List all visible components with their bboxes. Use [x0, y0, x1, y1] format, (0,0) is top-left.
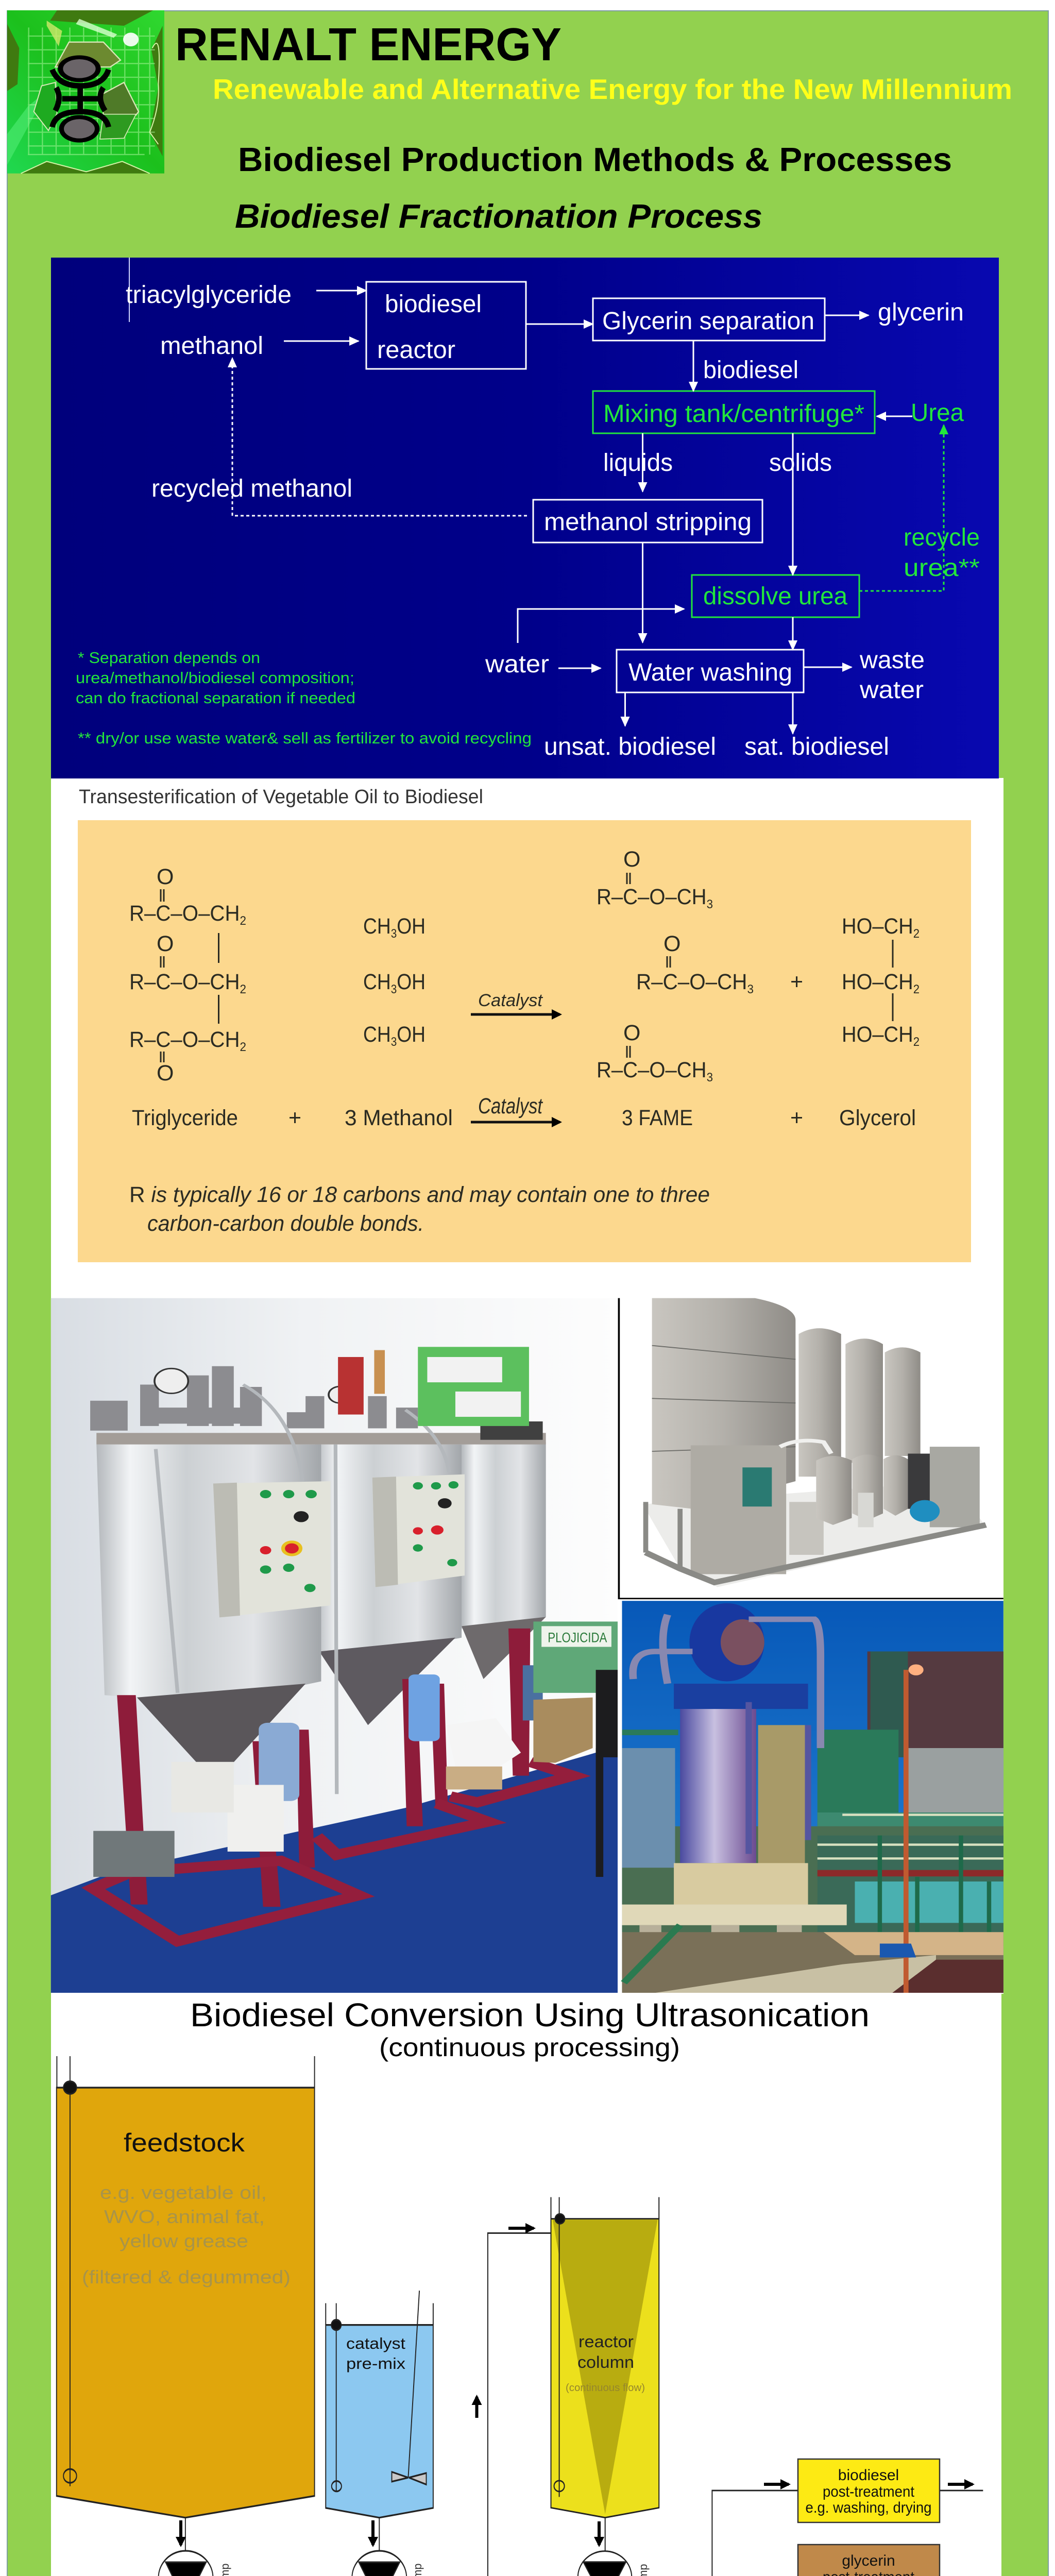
methanol formulas: 3 — [391, 982, 397, 996]
flowchart labels: water — [485, 651, 549, 678]
glycerol structure: 2 — [913, 927, 920, 941]
flowchart labels: waste — [859, 647, 925, 674]
triglyceride structure: R–C–O–CH — [129, 1027, 247, 1052]
flowchart labels: methanol stripping — [544, 509, 752, 536]
biodiesel post-treatment box: e.g. washing, drying — [806, 2499, 931, 2516]
word equation: Triglyceride — [132, 1106, 238, 1130]
FAME structures: O — [623, 847, 640, 872]
glycerol structure: HO–CH — [842, 1022, 920, 1047]
word equation: + — [790, 1106, 803, 1130]
glycerol structure: HO–CH — [842, 970, 920, 994]
flowchart labels: biodiesel — [385, 291, 482, 318]
footnotes: urea/methanol/biodiesel composition; — [76, 669, 354, 687]
glycerol structure: 2 — [913, 982, 920, 996]
feedstock and catalyst tanks with pumps: (filtered & degummed) — [82, 2266, 291, 2287]
FAME structures: R–C–O–CH — [636, 970, 754, 994]
title: Renalt Energy: RENALT ENERGY — [175, 19, 561, 71]
flowchart labels — [126, 281, 980, 760]
flowchart labels: Urea — [911, 399, 964, 427]
panel: ultrasonic conversion — [51, 1993, 1003, 2576]
triglyceride structure: 2 — [240, 914, 246, 928]
flowchart labels: liquids — [603, 449, 673, 477]
white content background — [51, 778, 1003, 1994]
methanol formulas: CH — [363, 914, 395, 939]
FAME structures: R–C–O–CH — [597, 885, 714, 909]
heading: production methods: Biodiesel Production Methods & Processes — [238, 141, 952, 178]
FAME structures: O — [623, 1021, 640, 1045]
photo: batch biodiesel processors: PLOJICIDA — [548, 1630, 607, 1645]
reactor column with return line — [477, 2197, 669, 2576]
icon: renalt energy logo — [7, 10, 164, 174]
flow arrows — [232, 291, 944, 734]
flowchart labels: methanol — [160, 332, 263, 360]
glycerol structure: 2 — [913, 1035, 920, 1049]
flowchart labels: reactor — [377, 336, 455, 364]
R group note: carbon-carbon double bonds. — [147, 1211, 424, 1236]
FAME structures: 3 — [707, 897, 713, 911]
triglyceride structure: O — [157, 931, 174, 956]
feedstock and catalyst tanks with pumps: e.g. vegetable oil, — [100, 2182, 267, 2203]
methanol formulas: OH — [397, 1022, 426, 1047]
flowchart labels: unsat. biodiesel — [544, 733, 716, 760]
panel: biodiesel fractionation flowchart — [51, 258, 999, 778]
transesterification heading: Transesterification of Vegetable Oil to Biodiesel — [79, 786, 483, 808]
triglyceride structure: R–C–O–CH — [129, 901, 247, 926]
photo: batch biodiesel processors — [51, 1298, 618, 1993]
flowchart labels: Mixing tank/centrifuge* — [603, 400, 864, 428]
feedstock and catalyst tanks with pumps: catalyst — [346, 2334, 405, 2352]
word equation: 3 Methanol — [345, 1106, 453, 1130]
flowchart labels: biodiesel — [703, 357, 798, 384]
glycerol structure: HO–CH — [842, 914, 920, 939]
flowchart labels: triacylglyceride — [126, 281, 292, 309]
FAME structures: R–C–O–CH — [597, 1058, 714, 1082]
flowchart labels: Glycerin separation — [602, 308, 814, 335]
methanol formulas: CH — [363, 970, 395, 994]
methanol formulas: OH — [397, 970, 426, 994]
product flow arrows — [764, 2484, 973, 2576]
triglyceride structure: O — [157, 865, 174, 889]
biodiesel post-treatment box: biodiesel — [838, 2467, 899, 2484]
methanol formulas: 3 — [391, 1035, 397, 1049]
glycerol structure — [842, 914, 920, 1049]
FAME structures: O — [663, 931, 680, 956]
R group note: R is typically 16 or 18 carbons and may contain one to three — [129, 1182, 710, 1207]
flowchart labels: urea** — [904, 554, 980, 582]
arrow: structural reaction: Catalyst — [478, 991, 543, 1010]
flowchart labels: glycerin — [878, 299, 964, 326]
tagline: Renewable and Alternative Energy for the New Millennium — [213, 73, 1012, 105]
feedstock and catalyst tanks with pumps: WVO, animal fat, — [104, 2206, 265, 2227]
flowchart labels: dissolve urea — [703, 583, 847, 610]
reactor column with return line: column — [577, 2353, 634, 2371]
FAME structures: 3 — [747, 982, 754, 996]
methanol formulas: 3 — [391, 927, 397, 941]
reaction background — [78, 820, 971, 1262]
footnotes: * Separation depends on — [78, 649, 260, 667]
FAME structures: + — [790, 970, 803, 994]
heading: ultrasonication: Biodiesel Conversion Using Ultrasonication — [190, 1996, 870, 2033]
triglyceride structure: O — [157, 1061, 174, 1086]
photo: biodiesel refinery at night — [622, 1601, 1003, 1993]
glycerin post-treatment box: glycerin — [842, 2552, 895, 2569]
flowchart labels: solids — [769, 449, 832, 477]
heading: fractionation process: Biodiesel Fractionation Process — [235, 197, 762, 235]
word equation: Glycerol — [839, 1106, 916, 1130]
triglyceride structure: 2 — [240, 1040, 246, 1054]
feedstock and catalyst tanks with pumps — [57, 2056, 433, 2576]
photo: industrial biodiesel skid — [619, 1298, 1003, 1599]
footnotes — [76, 649, 532, 747]
biodiesel post-treatment box: post-treatment — [823, 2483, 915, 2500]
centrifuge — [669, 2490, 983, 2576]
flowchart labels: recycled methanol — [151, 475, 352, 502]
methanol formulas — [363, 914, 426, 1049]
feedstock and catalyst tanks with pumps: yellow grease — [120, 2230, 248, 2251]
methanol formulas: CH — [363, 1022, 395, 1047]
footnotes: can do fractional separation if needed — [76, 689, 355, 707]
glycerin post-treatment box — [798, 2545, 940, 2576]
flowchart labels: sat. biodiesel — [744, 733, 889, 760]
FAME structures — [597, 847, 803, 1084]
flowchart labels: water — [859, 676, 924, 704]
methanol formulas: OH — [397, 914, 426, 939]
flowchart labels: Water washing — [628, 659, 792, 686]
R group note — [129, 1182, 710, 1236]
reactor column with return line: reactor — [578, 2332, 634, 2351]
subheading: (continuous processing) — [379, 2033, 680, 2062]
word equation: Catalyst — [478, 1094, 543, 1118]
word equation: + — [288, 1106, 301, 1130]
triglyceride structure: 2 — [240, 982, 246, 996]
footnotes: ** dry/or use waste water& sell as fertilizer to avoid recycling — [78, 729, 532, 747]
panel: header — [7, 10, 1012, 235]
biodiesel post-treatment box — [798, 2459, 940, 2522]
FAME structures: 3 — [707, 1071, 713, 1084]
reactor column with return line: (continuous flow) — [566, 2382, 645, 2394]
word equation — [132, 1094, 916, 1130]
feedstock and catalyst tanks with pumps: pre-mix — [346, 2354, 406, 2372]
process boxes — [366, 282, 875, 692]
triglyceride structure: R–C–O–CH — [129, 970, 247, 994]
word equation: 3 FAME — [622, 1106, 693, 1130]
flowchart labels: recycle — [904, 524, 980, 551]
triglyceride structure — [129, 865, 246, 1086]
panel: transesterification — [78, 786, 971, 1262]
feedstock and catalyst tanks with pumps: feedstock — [124, 2128, 245, 2157]
